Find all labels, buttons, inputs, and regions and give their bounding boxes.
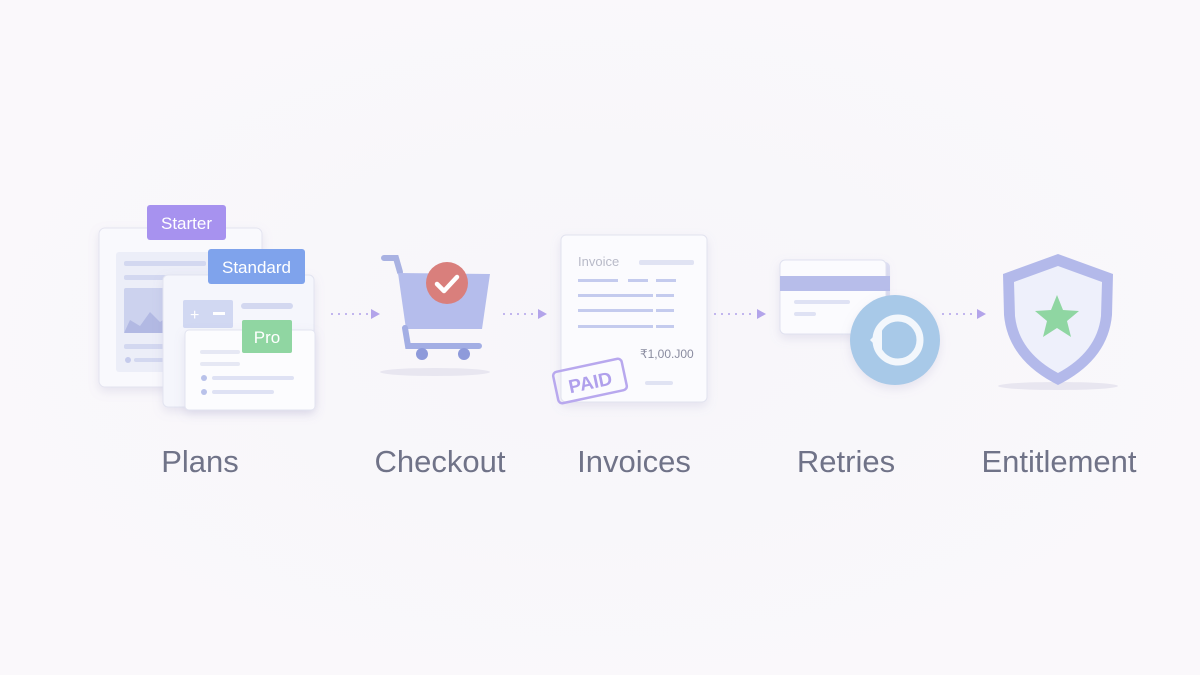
arrow 1: [331, 309, 380, 319]
tag: Pro: Pro: [254, 328, 280, 347]
icon: invoice: [552, 235, 707, 404]
label: Checkout: Checkout: [375, 444, 506, 479]
tag: Starter: [147, 205, 226, 240]
stamp: PAID: [552, 358, 628, 404]
icon: plans: +: [190, 307, 199, 324]
label: Retries: Retries: [797, 444, 895, 479]
label: Plans: Plans: [161, 444, 239, 479]
icon: invoice: ₹1,00.J00: [640, 347, 694, 361]
arrow 3: [714, 309, 766, 319]
stamp: PAID: PAID: [567, 369, 614, 398]
icon: shield: [998, 254, 1118, 390]
icon: retries: [780, 260, 940, 385]
label: Entitlement: Entitlement: [981, 444, 1137, 479]
labels: [161, 444, 1137, 479]
tag: Starter: Starter: [161, 214, 212, 233]
tag: Standard: Standard: [222, 258, 291, 277]
arrow 2: [503, 309, 547, 319]
label: Invoices: Invoices: [577, 444, 691, 479]
icon: invoice: Invoice: [578, 254, 619, 269]
icon: cart: [380, 258, 490, 376]
tag: Standard: [208, 249, 305, 284]
tag: Pro: [242, 320, 292, 353]
arrow 4: [942, 309, 986, 319]
icon: plans: [99, 205, 315, 410]
